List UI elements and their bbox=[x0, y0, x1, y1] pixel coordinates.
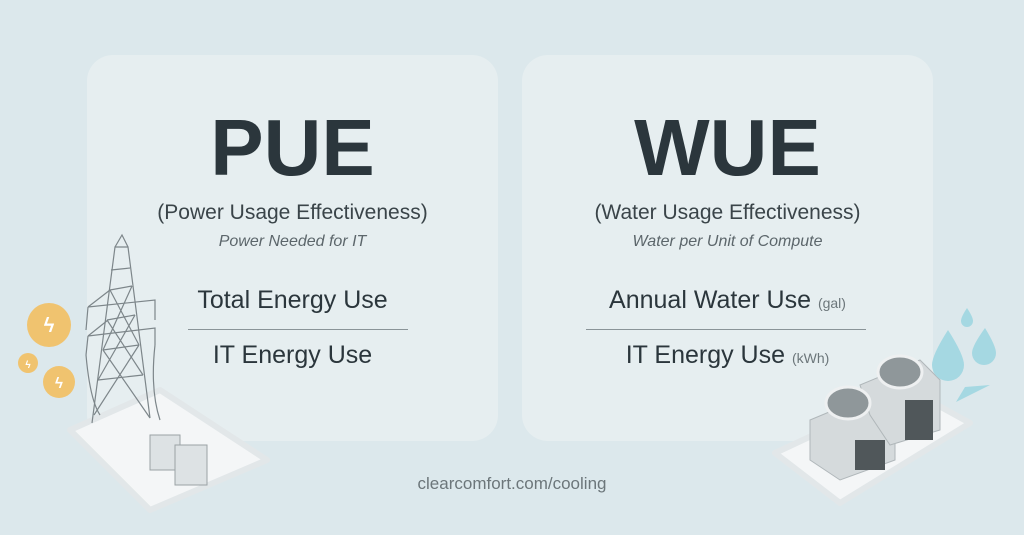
illustration: power tower: ϟ bbox=[25, 360, 31, 371]
subtitle: (Water Usage Effectiveness) bbox=[594, 201, 861, 224]
footer url: clearcomfort.com/cooling bbox=[418, 474, 606, 493]
icons: water drops bbox=[932, 308, 996, 402]
numerator: Annual Water Use (gal) bbox=[609, 286, 846, 314]
subtitle: (Power Usage Effectiveness) bbox=[157, 201, 428, 224]
panel: WUE bbox=[522, 55, 933, 441]
description: Water per Unit of Compute bbox=[632, 233, 822, 250]
denominator: IT Energy Use bbox=[213, 341, 372, 369]
illustration: power tower: ϟ bbox=[55, 375, 63, 392]
title: WUE: WUE bbox=[634, 103, 821, 192]
icons: lightning bolts bbox=[18, 303, 75, 398]
illustration: cooling units bbox=[780, 308, 996, 500]
panel: PUE bbox=[87, 55, 498, 441]
description: Power Needed for IT bbox=[219, 233, 366, 250]
title: PUE: PUE bbox=[210, 103, 375, 192]
illustration: power tower: ϟ bbox=[44, 315, 55, 337]
illustration: power tower bbox=[18, 234, 260, 506]
numerator: Total Energy Use bbox=[197, 286, 388, 314]
denominator: IT Energy Use (kWh) bbox=[626, 341, 829, 369]
